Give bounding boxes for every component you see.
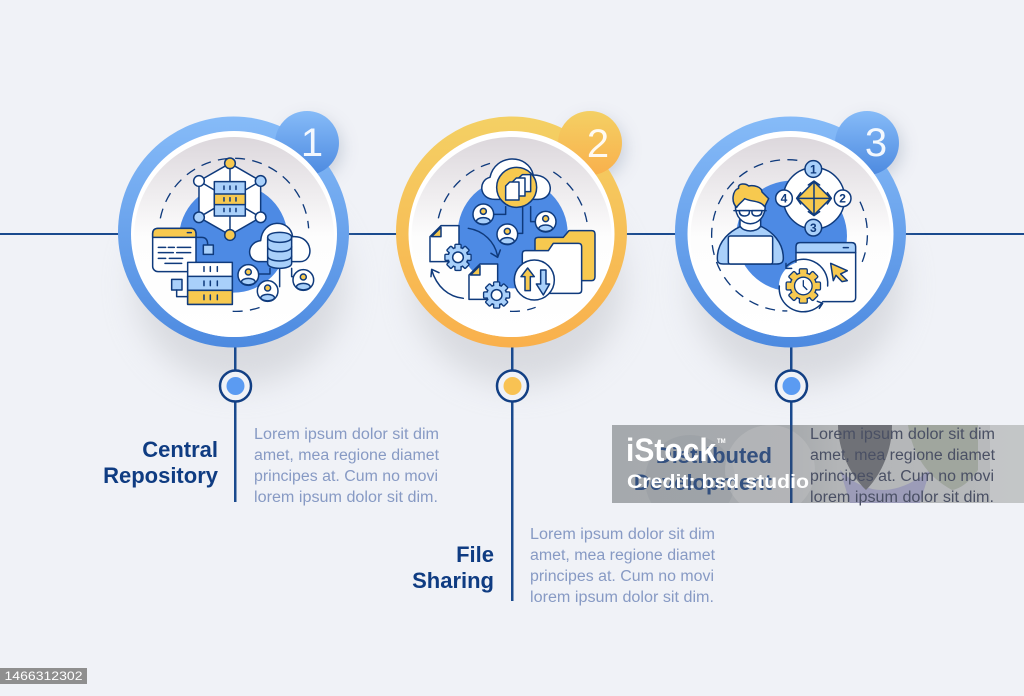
icon: distributed development: [712, 160, 867, 312]
text: step 3 body: amet, mea regione diamet: [810, 447, 996, 464]
heading: distributed development (under watermark): Development: [634, 470, 773, 495]
text: step 1 body: [254, 426, 440, 506]
badge: number 1: 1: [301, 121, 323, 165]
heading: distributed development (under watermark): Distributed: [656, 443, 772, 468]
badge: number 1: [275, 111, 339, 175]
panel: step 2 medallion: [396, 111, 627, 348]
text: step 3 body: Lorem ipsum dolor sit dim: [810, 426, 995, 443]
heading: distributed development (under watermark): [634, 443, 773, 495]
text: step 2 body: [530, 526, 716, 606]
panel: step 3 medallion: [675, 111, 906, 348]
text: step 2 body: principes at. Cum no movi: [530, 568, 714, 585]
text: step 2 body: amet, mea regione diamet: [530, 547, 716, 564]
watermark text: iStock: [626, 432, 716, 468]
shadow: circle 1: [135, 185, 345, 385]
icon: distributed development: 4: [781, 192, 788, 206]
icon: file sharing: [430, 159, 595, 311]
badge: number 2: [558, 111, 622, 175]
panel: step 1 medallion: [118, 111, 349, 348]
shadow: circle 2: [413, 185, 623, 385]
heading: central repository: Repository: [103, 463, 219, 488]
connector: step 3: [790, 340, 792, 503]
connector: step 2: [511, 340, 514, 601]
text: step 2 body: Lorem ipsum dolor sit dim: [530, 526, 715, 543]
icon: distributed development: 2: [839, 192, 846, 206]
timeline horizontal line: [0, 233, 1024, 235]
badge: number 3: [835, 111, 899, 175]
text: step 1 body: amet, mea regione diamet: [254, 447, 440, 464]
text: step 1 body: principes at. Cum no movi: [254, 468, 438, 485]
connector: step 1: [234, 340, 236, 502]
heading: central repository: Central: [142, 437, 218, 462]
heading: file sharing: File: [456, 542, 494, 567]
badge: number 3: 3: [865, 121, 887, 165]
marker: step 2: [497, 370, 528, 402]
icon: distributed development: 3: [810, 221, 817, 235]
badge: number 2: 2: [587, 122, 609, 166]
marker: step 1: [220, 370, 251, 402]
marker: step 3: [776, 370, 807, 402]
text: step 2 body: lorem ipsum dolor sit dim.: [530, 589, 714, 606]
watermark text: TM: [717, 439, 726, 445]
shadow: circle 3: [692, 185, 902, 385]
text: step 3 body: lorem ipsum dolor sit dim.: [810, 489, 994, 506]
image id tag: 1466312302: [4, 669, 83, 683]
text: step 1 body: lorem ipsum dolor sit dim.: [254, 489, 438, 506]
text: step 3 body: [810, 426, 996, 506]
text: step 3 body: principes at. Cum no movi: [810, 468, 994, 485]
icon: distributed development: 1: [810, 162, 817, 176]
heading: file sharing: Sharing: [412, 568, 494, 593]
watermark text: [626, 432, 809, 493]
image id tag: [0, 668, 87, 684]
watermark band: [612, 425, 1024, 506]
heading: file sharing: [412, 542, 494, 593]
heading: central repository: [103, 437, 219, 488]
icon: central repository: [153, 158, 314, 311]
watermark text: Credit: bsd studio: [627, 472, 809, 493]
text: step 1 body: Lorem ipsum dolor sit dim: [254, 426, 439, 443]
